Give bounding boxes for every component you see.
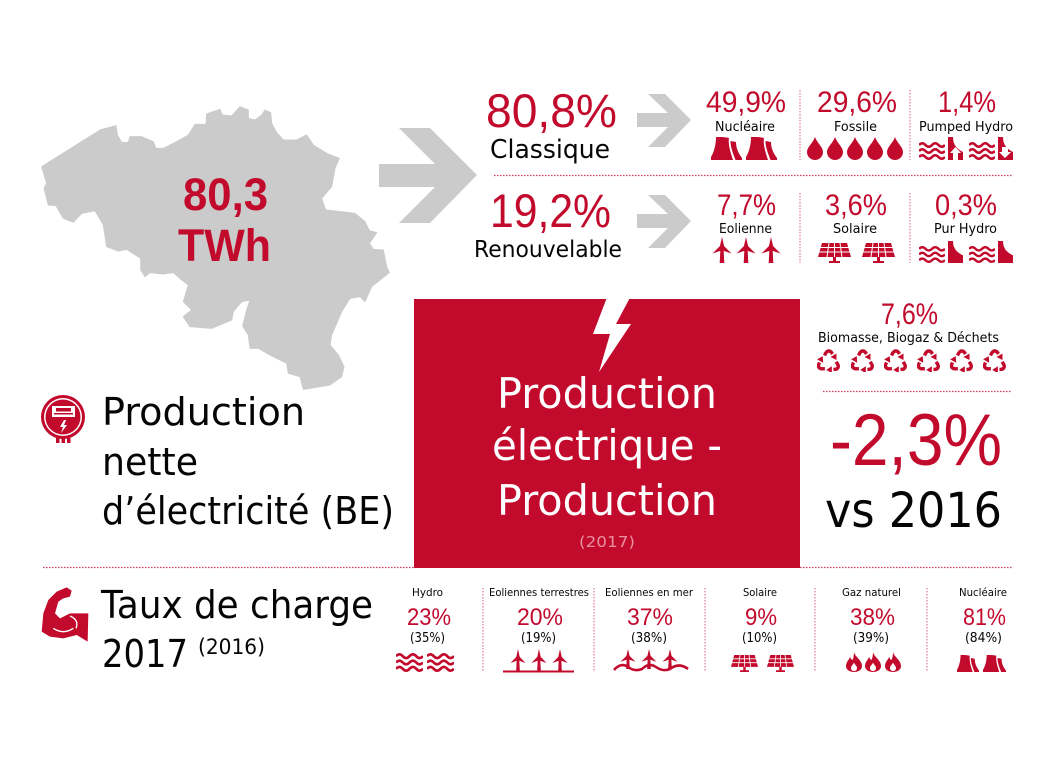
- total production value: TWh: [178, 220, 271, 271]
- headline: classique: Classique: [490, 135, 610, 165]
- headline: classique: 80,8%: [486, 84, 617, 137]
- stat: pumped hydro: [919, 86, 1013, 160]
- stat: nucléaire: Nucléaire: [715, 120, 775, 135]
- load factor: eoliennes en mer: [605, 586, 693, 670]
- panel: production: Production: [497, 369, 717, 418]
- load factor: solaire: [731, 586, 794, 672]
- load factor: gaz naturel: (39%): [853, 631, 889, 646]
- arrow: big: [379, 128, 477, 223]
- load factor: eoliennes terrestres: [489, 586, 589, 672]
- load factor: nucléaire: [957, 586, 1007, 672]
- heading: production nette: Production: [102, 390, 305, 434]
- load factor: eoliennes terrestres: 20%: [517, 604, 563, 631]
- stat: biomasse: Biomasse, Biogaz & Déchets: [818, 331, 999, 346]
- heading: production nette: d’électricité (BE): [102, 489, 394, 533]
- heading: production nette: [102, 390, 394, 533]
- stat: eolienne: [712, 189, 780, 263]
- stat: fossile: 29,6%: [817, 86, 897, 119]
- load factor: nucléaire: 81%: [963, 604, 1006, 631]
- icon: electricity meter: [41, 395, 85, 443]
- load factor: eoliennes en mer: (38%): [631, 631, 667, 646]
- headline: renouvelable: Renouvelable: [474, 237, 622, 263]
- load factor: eoliennes en mer: 37%: [627, 604, 673, 631]
- stat: eolienne: 7,7%: [717, 189, 776, 222]
- stat: biomasse: [815, 298, 1006, 374]
- panel: production: électrique -: [492, 421, 722, 470]
- load factor: hydro: [396, 586, 454, 671]
- load factor: eoliennes en mer: Eoliennes en mer: [605, 586, 693, 599]
- arrow: renouvelable: [637, 195, 691, 248]
- stat: pur hydro: Pur Hydro: [934, 222, 997, 237]
- load factor: gaz naturel: Gaz naturel: [842, 586, 901, 599]
- heading: taux de charge: 2017: [102, 632, 188, 676]
- panel: production: (2017): [579, 533, 635, 551]
- stat: pumped hydro: 1,4%: [938, 86, 996, 119]
- stat: solaire: [818, 189, 895, 263]
- heading: taux de charge: (2016): [198, 635, 265, 659]
- stat: change vs 2016: vs 2016: [825, 483, 1002, 539]
- load factor: gaz naturel: 38%: [850, 604, 895, 631]
- load factor: solaire: Solaire: [743, 586, 777, 599]
- load factor: eoliennes terrestres: (19%): [521, 631, 556, 646]
- stat: pur hydro: [919, 189, 1013, 263]
- heading: taux de charge: [100, 583, 373, 676]
- load factor: solaire: 9%: [745, 604, 777, 631]
- stat: fossile: Fossile: [834, 120, 877, 135]
- load factor: gaz naturel: [842, 586, 901, 672]
- stat: eolienne: Eolienne: [719, 222, 772, 237]
- stat: solaire: 3,6%: [825, 189, 887, 222]
- headline: renouvelable: 19,2%: [490, 184, 611, 237]
- stat: nucléaire: [706, 86, 786, 160]
- load factor: nucléaire: Nucléaire: [959, 586, 1007, 599]
- load factor: eoliennes terrestres: Eoliennes terrestres: [489, 586, 589, 599]
- stat: fossile: [807, 86, 903, 160]
- load factor: solaire: (10%): [742, 631, 777, 646]
- stat: pumped hydro: Pumped Hydro: [919, 120, 1013, 135]
- icon: lightning bolt: [593, 292, 633, 372]
- stat: pur hydro: 0,3%: [935, 189, 997, 222]
- panel: production: [414, 292, 800, 568]
- stat: solaire: Solaire: [833, 222, 877, 237]
- stat: nucléaire: 49,9%: [706, 86, 786, 119]
- stat: change vs 2016: [825, 400, 1002, 539]
- total production value: 80,3: [183, 169, 268, 220]
- heading: production nette: nette: [102, 440, 198, 484]
- load factor: hydro: 23%: [407, 604, 451, 631]
- stat: change vs 2016: -2,3%: [830, 400, 1002, 481]
- panel: production: Production: [497, 476, 717, 525]
- load factor: hydro: Hydro: [412, 586, 443, 599]
- headline: renouvelable: [474, 184, 622, 263]
- stat: biomasse: 7,6%: [881, 298, 938, 331]
- map: Belgium: [42, 107, 389, 389]
- arrow: classique: [637, 94, 691, 147]
- load factor: hydro: (35%): [410, 631, 445, 646]
- total production value: [178, 169, 271, 271]
- icon: muscle: [42, 587, 88, 642]
- heading: taux de charge: Taux de charge: [100, 583, 373, 627]
- load factor: nucléaire: (84%): [965, 631, 1002, 646]
- headline: classique: [486, 84, 617, 165]
